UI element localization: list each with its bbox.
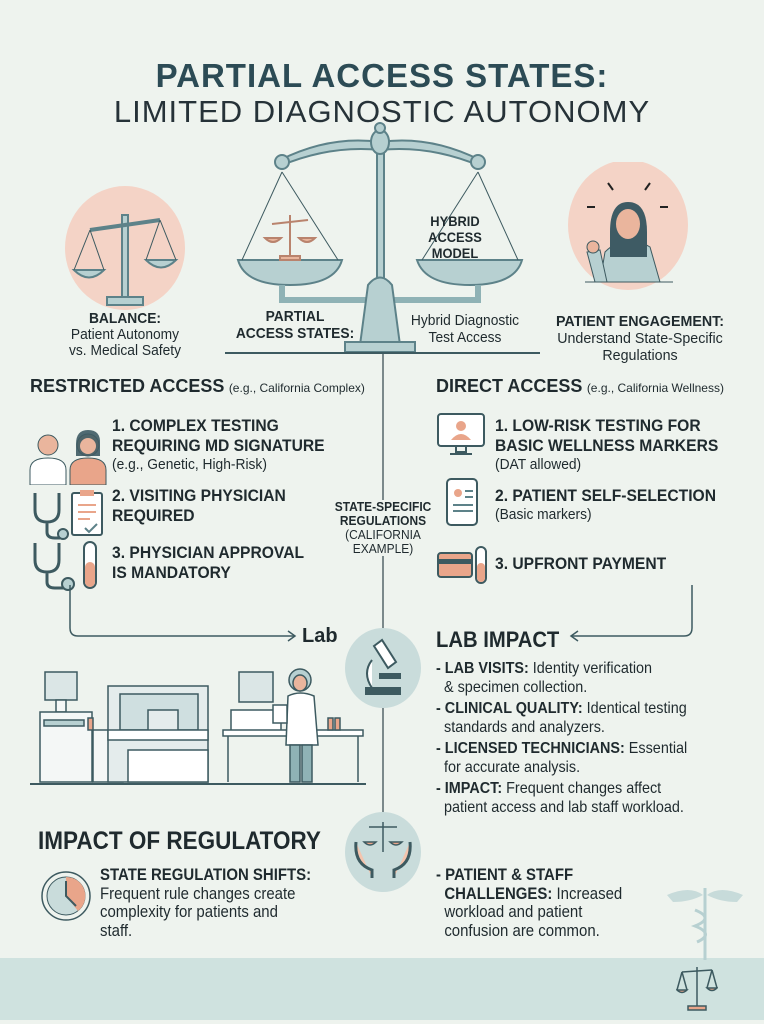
lab impact bullets: standards and analyzers. bbox=[444, 718, 605, 736]
item: physician approval: IS MANDATORY bbox=[112, 563, 231, 582]
item: complex testing: REQUIRING MD SIGNATURE bbox=[112, 436, 325, 455]
icon: clock bbox=[41, 871, 91, 921]
text: balance bbox=[69, 310, 181, 359]
item: complex testing: (e.g., Genetic, High-Risk) bbox=[112, 456, 267, 473]
lab impact bullets: - CLINICAL QUALITY: Identical testing bbox=[436, 700, 687, 717]
text: patient engagement: PATIENT ENGAGEMENT: bbox=[556, 313, 724, 330]
lab illustration bbox=[30, 668, 366, 785]
heading: direct access: DIRECT ACCESS (e.g., California Wellness) bbox=[436, 376, 724, 396]
icon: patient engagement bbox=[568, 162, 688, 290]
item: upfront payment: 3. UPFRONT PAYMENT bbox=[495, 554, 666, 573]
icon: microscope bbox=[345, 628, 421, 708]
text: state regulation shifts bbox=[100, 865, 311, 940]
item: complex testing: 1. COMPLEX TESTING bbox=[112, 416, 279, 435]
lab impact bullets: for accurate analysis. bbox=[444, 758, 580, 776]
icon: stethoscope tube bbox=[34, 541, 97, 591]
item: self-selection: 2. PATIENT SELF-SELECTION bbox=[495, 486, 716, 505]
label: partial access states: PARTIAL bbox=[266, 308, 324, 325]
text: patient & staff challenges: CHALLENGES: Increased bbox=[444, 884, 622, 902]
item: physician approval bbox=[112, 543, 304, 582]
icon: hands with scale bbox=[345, 812, 421, 892]
heading: restricted access: RESTRICTED ACCESS (e.g., California Complex) bbox=[30, 376, 365, 396]
text: patient & staff challenges bbox=[436, 865, 622, 940]
item: visiting physician bbox=[112, 486, 286, 525]
text: balance: Patient Autonomy bbox=[71, 326, 179, 343]
text: patient & staff challenges: workload and patient bbox=[444, 902, 582, 921]
item: complex testing bbox=[112, 416, 325, 473]
item: low-risk testing: 1. LOW-RISK TESTING FOR bbox=[495, 416, 701, 435]
lab impact bullets: & specimen collection. bbox=[444, 678, 587, 696]
label: hybrid access model: HYBRID ACCESS MODEL bbox=[428, 213, 482, 261]
text: state-specific regulations: (CALIFORNIA bbox=[345, 527, 421, 542]
lab impact bullets: - LICENSED TECHNICIANS: Essential bbox=[436, 740, 687, 757]
arrows to lab bbox=[69, 585, 693, 642]
lab impact bullets: patient access and lab staff workload. bbox=[444, 798, 684, 816]
icon: tablet bbox=[446, 478, 478, 526]
text: state-specific regulations: STATE-SPECIFIC bbox=[335, 499, 431, 514]
title bbox=[114, 57, 650, 129]
lab impact bullets bbox=[436, 660, 687, 816]
text: state-specific regulations: EXAMPLE) bbox=[353, 541, 413, 556]
item: low-risk testing bbox=[495, 416, 718, 473]
label: partial access states: ACCESS STATES: bbox=[236, 325, 354, 342]
title: PARTIAL ACCESS STATES: bbox=[156, 57, 608, 94]
label: hybrid diagnostic test access: Hybrid Diagnostic Test Access bbox=[411, 312, 519, 346]
icon: small scale bbox=[676, 967, 718, 1011]
text: state regulation shifts: STATE REGULATION SHIFTS: bbox=[100, 865, 311, 884]
text: state regulation shifts: Frequent rule changes create bbox=[100, 884, 295, 902]
text: patient & staff challenges: - PATIENT & STAFF bbox=[436, 865, 573, 884]
text: patient engagement: Understand State-Specific bbox=[557, 330, 723, 347]
icon: doctor and patient bbox=[30, 430, 106, 485]
text: state regulation shifts: complexity for patients and bbox=[100, 902, 278, 921]
text: balance: vs. Medical Safety bbox=[69, 342, 181, 359]
item: self-selection bbox=[495, 486, 716, 523]
item: physician approval: 3. PHYSICIAN APPROVAL bbox=[112, 543, 304, 562]
text: balance: BALANCE: bbox=[89, 310, 161, 327]
label: partial access states bbox=[236, 308, 354, 342]
text: lab: Lab bbox=[302, 625, 338, 647]
bottom band bbox=[0, 958, 764, 1020]
text: state regulation shifts: staff. bbox=[100, 920, 132, 940]
icon: card and tube bbox=[437, 546, 487, 584]
heading: impact of regulatory: IMPACT OF REGULATORY bbox=[38, 827, 321, 855]
heading: lab impact: LAB IMPACT bbox=[436, 627, 559, 652]
text: patient & staff challenges: confusion are common. bbox=[444, 920, 600, 940]
text: state-specific regulations: REGULATIONS bbox=[340, 513, 426, 528]
item: visiting physician: REQUIRED bbox=[112, 506, 195, 525]
item: low-risk testing: BASIC WELLNESS MARKERS bbox=[495, 436, 718, 455]
item: low-risk testing: (DAT allowed) bbox=[495, 456, 581, 473]
big scale bbox=[225, 122, 540, 354]
icon: caduceus bbox=[667, 888, 743, 960]
lab impact bullets: - LAB VISITS: Identity verification bbox=[436, 660, 652, 677]
text: patient engagement bbox=[556, 313, 724, 364]
lab impact bullets: - IMPACT: Frequent changes affect bbox=[436, 780, 661, 797]
icon: monitor bbox=[437, 413, 485, 455]
text: patient engagement: Regulations bbox=[602, 347, 678, 364]
text: state-specific regulations bbox=[319, 500, 447, 556]
title: LIMITED DIAGNOSTIC AUTONOMY bbox=[114, 94, 650, 129]
icon: stethoscope clipboard bbox=[34, 490, 103, 540]
icon: balance circle bbox=[65, 186, 185, 310]
item: visiting physician: 2. VISITING PHYSICIAN bbox=[112, 486, 286, 505]
item: self-selection: (Basic markers) bbox=[495, 506, 592, 523]
